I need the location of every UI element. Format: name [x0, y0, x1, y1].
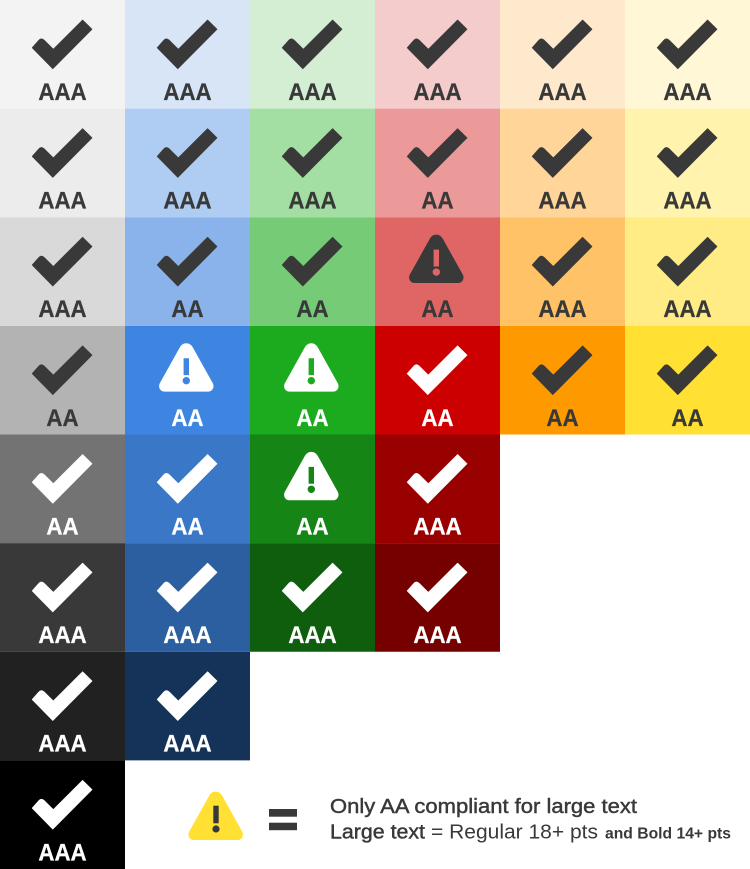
cell: red 2, pass AA: [375, 109, 500, 217]
cell: red 5, pass AAA: AAA: [413, 513, 462, 540]
cell: blue 4, warning AA: AA: [171, 404, 204, 431]
cell: orange 3, pass AAA: [500, 217, 625, 326]
cell: grey 1, pass AAA: AAA: [38, 78, 87, 105]
legend heading: Only AA compliant for large text: [330, 796, 637, 818]
cell: orange 4, pass AA: [500, 326, 625, 434]
cell: red 4, pass AA: [375, 326, 500, 434]
cell: orange 2, pass AAA: [500, 109, 625, 217]
cell: blue 7, pass AAA: AAA: [163, 730, 212, 757]
cell: blue 1, pass AAA: AAA: [163, 78, 212, 105]
icon: equals sign: [269, 809, 297, 830]
cell: green 3, pass AA: [250, 217, 375, 326]
cell: green 6, pass AAA: AAA: [288, 621, 337, 648]
cell: red 1, pass AAA: [375, 0, 500, 109]
cell: green 1, pass AAA: [250, 0, 375, 109]
cell: red 6, pass AAA: AAA: [413, 621, 462, 648]
cell: yellow 1, pass AAA: [625, 0, 750, 109]
cell: red 6, pass AAA: [375, 543, 500, 652]
cell: orange 1, pass AAA: [500, 0, 625, 109]
legend: [188, 792, 731, 844]
cell: red 3, warning AA: [375, 217, 500, 326]
cell: grey 2, pass AAA: [0, 109, 125, 217]
cell: blue 6, pass AAA: AAA: [163, 621, 212, 648]
cell: red 4, pass AA: AA: [421, 404, 454, 431]
cell: grey 4, pass AA: [0, 326, 125, 434]
cell: orange 2, pass AAA: AAA: [538, 187, 587, 214]
icon: yellow warning triangle: [188, 792, 243, 840]
cell: grey 5, pass AA: [0, 434, 125, 543]
cell: green 5, warning AA: AA: [296, 513, 329, 540]
cell: yellow 2, pass AAA: AAA: [663, 187, 712, 214]
cell: blue 3, pass AA: AA: [171, 296, 204, 322]
cell: yellow 3, pass AAA: [625, 217, 750, 326]
cell: blue 1, pass AAA: [125, 0, 250, 109]
cell: orange 3, pass AAA: AAA: [538, 296, 587, 322]
cell: black, pass AAA: [0, 760, 125, 869]
cell: grey 3, pass AAA: [0, 217, 125, 326]
cell: yellow 4, pass AA: AA: [671, 404, 704, 431]
cell: blue 4, warning AA: [125, 326, 250, 434]
cell: blue 2, pass AAA: AAA: [163, 187, 212, 214]
cell: grey 1, pass AAA: [0, 0, 125, 109]
cell: orange 4, pass AA: AA: [546, 404, 579, 431]
cell: blue 6, pass AAA: [125, 543, 250, 652]
cell: green 4, warning AA: [250, 326, 375, 434]
legend definition: [330, 822, 731, 844]
cell: green 3, pass AA: AA: [296, 296, 329, 322]
cell: green 5, warning AA: [250, 434, 375, 543]
cell: grey 7, pass AAA: AAA: [38, 730, 87, 757]
legend definition: and Bold 14+ pts: [605, 826, 731, 842]
cell: black, pass AAA: AAA: [38, 839, 87, 866]
cell: red 2, pass AA: AA: [421, 187, 454, 214]
cell: grey 5, pass AA: AA: [46, 513, 79, 540]
cell: green 4, warning AA: AA: [296, 404, 329, 431]
cell: grey 4, pass AA: AA: [46, 404, 79, 431]
cell: grey 3, pass AAA: AAA: [38, 296, 87, 322]
cell: red 1, pass AAA: AAA: [413, 78, 462, 105]
cell: red 3, warning AA: AA: [421, 296, 454, 322]
cell: blue 3, pass AA: [125, 217, 250, 326]
cell: yellow 1, pass AAA: AAA: [663, 78, 712, 105]
cell: grey 2, pass AAA: AAA: [38, 187, 87, 214]
cell: green 2, pass AAA: [250, 109, 375, 217]
cell: yellow 4, pass AA: [625, 326, 750, 434]
cell: green 6, pass AAA: [250, 543, 375, 652]
cell: green 1, pass AAA: AAA: [288, 78, 337, 105]
legend definition: = Regular 18+ pts: [431, 822, 598, 844]
cell: orange 1, pass AAA: AAA: [538, 78, 587, 105]
cell: grey 6, pass AAA: AAA: [38, 621, 87, 648]
cell: blue 5, pass AA: [125, 434, 250, 543]
cell: yellow 3, pass AAA: AAA: [663, 296, 712, 322]
cell: blue 7, pass AAA: [125, 652, 250, 760]
cell: green 2, pass AAA: AAA: [288, 187, 337, 214]
cell: yellow 2, pass AAA: [625, 109, 750, 217]
cell: blue 5, pass AA: AA: [171, 513, 204, 540]
cell: grey 6, pass AAA: [0, 543, 125, 652]
cell: grey 7, pass AAA: [0, 652, 125, 760]
cell: red 5, pass AAA: [375, 434, 500, 543]
legend definition: Large text: [330, 822, 425, 844]
cell: blue 2, pass AAA: [125, 109, 250, 217]
